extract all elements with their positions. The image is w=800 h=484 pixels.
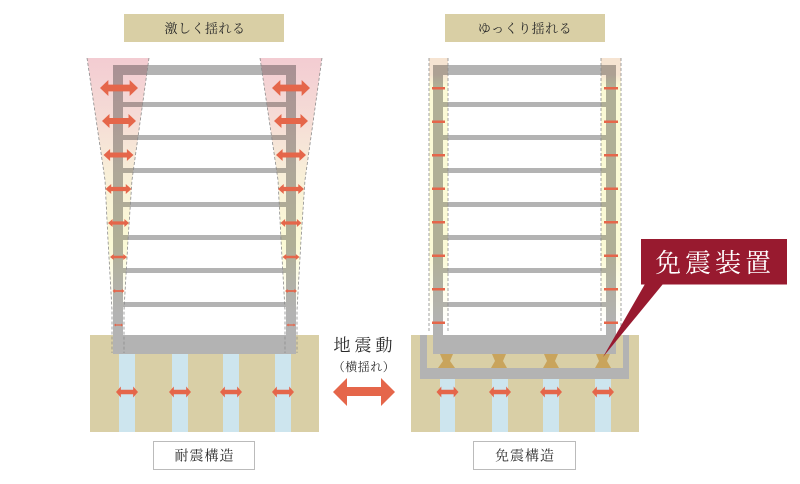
sway envelope: right side	[260, 58, 322, 335]
callout: seismic isolator: 免震装置	[655, 249, 775, 278]
arrow: ground motion	[333, 378, 395, 406]
small sway ticks	[432, 87, 618, 324]
shaking arrows: left column	[100, 80, 138, 326]
heading: slow shaking	[445, 14, 605, 42]
label: seismic isolation structure: 免震構造	[495, 448, 555, 464]
label: ground motion	[333, 336, 396, 374]
sway envelope: left side	[87, 58, 149, 335]
heading: violent shaking: 激しく揺れる	[164, 21, 246, 36]
heading: slow shaking: ゆっくり揺れる	[478, 21, 572, 36]
callout: seismic isolator	[603, 239, 787, 357]
label: seismic isolation structure	[474, 442, 576, 470]
sway envelope outlines	[87, 58, 322, 353]
sway band outlines	[429, 58, 621, 332]
seismic isolators	[438, 354, 611, 368]
shaking arrows: right column	[272, 80, 310, 326]
ground arrows: seismic isolation	[436, 386, 614, 398]
heading: violent shaking	[124, 14, 284, 42]
label: ground motion: 地震動	[334, 336, 396, 355]
ground: seismic isolation structure	[411, 335, 639, 432]
label: ground motion: （横揺れ）	[333, 359, 395, 374]
sway bands: seismic isolation	[429, 58, 621, 335]
building: earthquake-resistant structure	[113, 65, 296, 354]
ground arrows: earthquake-resistant	[116, 386, 294, 398]
foundation pit: U-shaped retaining wall	[420, 335, 629, 379]
label: earthquake-resistant structure	[154, 442, 254, 470]
ground: earthquake-resistant structure	[90, 335, 319, 432]
building: seismic isolation structure	[433, 65, 616, 354]
label: earthquake-resistant structure: 耐震構造	[174, 448, 234, 464]
